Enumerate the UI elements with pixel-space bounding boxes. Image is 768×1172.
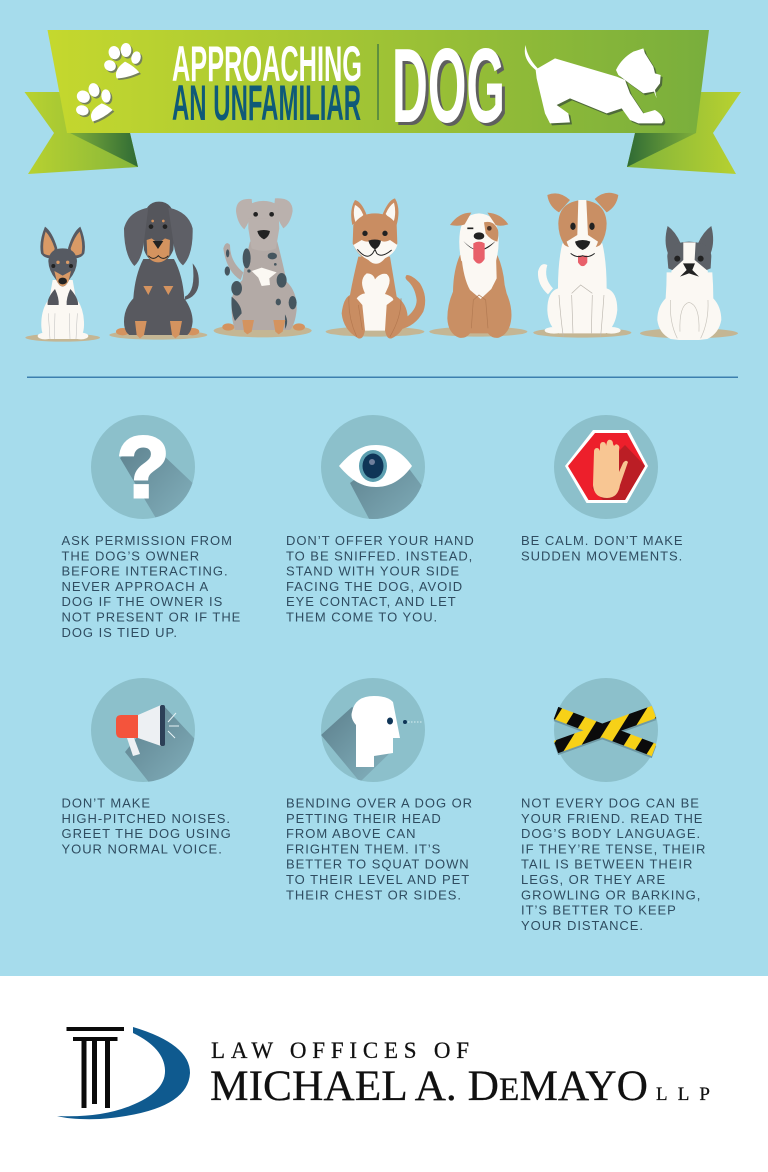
logo mark bbox=[57, 1027, 190, 1119]
dog 2: black and tan hound bbox=[109, 202, 207, 340]
right fold bbox=[627, 133, 696, 167]
text block: LEGS, OR THEY ARE bbox=[521, 872, 666, 887]
divider line bbox=[27, 376, 738, 378]
firm name line 1: LAW OFFICES OF bbox=[211, 1038, 469, 1063]
icon: stop hand sign bbox=[554, 415, 658, 519]
icon: head profile bbox=[321, 678, 425, 782]
tip 2: hand to be sniffed bbox=[286, 415, 475, 624]
text block: GROWLING OR BARKING, bbox=[521, 887, 701, 902]
text block: EYE CONTACT, AND LET bbox=[286, 594, 457, 609]
text block: BE CALM. DON’T MAKE bbox=[521, 533, 683, 548]
text block: FRIGHTEN THEM. IT’S bbox=[286, 841, 441, 856]
icon: paw prints bbox=[75, 43, 144, 123]
text block: PETTING THEIR HEAD bbox=[286, 811, 442, 826]
text block: BETTER TO SQUAT DOWN bbox=[286, 857, 470, 872]
text block: FROM ABOVE CAN bbox=[286, 826, 416, 841]
banner bbox=[24, 27, 741, 174]
firm name line 2: MICHAEL A. DEMAYO bbox=[210, 1063, 648, 1110]
firm suffix: LLP bbox=[656, 1084, 710, 1105]
tip 1: ask permission bbox=[62, 415, 241, 640]
icon: question mark: ? bbox=[117, 420, 169, 516]
text block: NEVER APPROACH A bbox=[62, 579, 209, 594]
text block: DOG IS TIED UP. bbox=[62, 625, 178, 640]
icon: eye bbox=[321, 415, 425, 519]
text block: TO BE SNIFFED. INSTEAD, bbox=[286, 548, 473, 563]
text block: TO THEIR LEVEL AND PET bbox=[286, 872, 470, 887]
text block: DON’T MAKE bbox=[62, 796, 151, 810]
text block: TAIL IS BETWEEN THEIR bbox=[521, 857, 693, 872]
text block: SUDDEN MOVEMENTS. bbox=[521, 548, 683, 563]
dog 3: grey spotted dog bbox=[214, 198, 312, 337]
right ribbon tail bbox=[627, 92, 741, 174]
footer panel bbox=[0, 976, 768, 1172]
tip 4: high-pitched noises bbox=[62, 678, 232, 856]
dog 5: pit bull bbox=[429, 213, 527, 338]
text block: DOG’S BODY LANGUAGE. bbox=[521, 826, 701, 841]
text block: YOUR NORMAL VOICE. bbox=[62, 841, 223, 856]
dog 1: small terrier bbox=[25, 227, 100, 342]
text block: HIGH-PITCHED NOISES. bbox=[62, 811, 231, 826]
banner: AN UNFAMILIAR bbox=[172, 75, 361, 131]
left fold bbox=[70, 133, 138, 167]
text block: YOUR FRIEND. READ THE bbox=[521, 811, 703, 826]
text block: BEFORE INTERACTING. bbox=[62, 564, 229, 579]
tip 6: body language bbox=[521, 678, 706, 933]
banner: DOG bbox=[395, 30, 508, 148]
icon: playing dog silhouette bbox=[525, 45, 665, 125]
text block: ASK PERMISSION FROM bbox=[62, 533, 233, 548]
dogs row bbox=[25, 193, 738, 342]
icon: megaphone bbox=[91, 678, 195, 782]
tip 3: be calm bbox=[521, 415, 683, 563]
text block: BENDING OVER A DOG OR bbox=[286, 796, 473, 810]
text block: NOT PRESENT OR IF THE bbox=[62, 610, 241, 624]
title: approaching: APPROACHING bbox=[172, 36, 362, 92]
dog 7: boston terrier bbox=[640, 226, 738, 340]
text block: FACING THE DOG, AVOID bbox=[286, 579, 463, 594]
text block: YOUR DISTANCE. bbox=[521, 918, 644, 933]
icon: question mark bbox=[91, 415, 200, 525]
text block: IF THEY’RE TENSE, THEIR bbox=[521, 841, 706, 856]
text block: THEM COME TO YOU. bbox=[286, 610, 438, 624]
text block: NOT EVERY DOG CAN BE bbox=[521, 796, 700, 810]
dog 4: husky bbox=[326, 198, 425, 339]
text block: THE DOG’S OWNER bbox=[62, 548, 200, 563]
text block: DOG IF THE OWNER IS bbox=[62, 594, 223, 609]
tip 5: bending over bbox=[286, 678, 473, 902]
text block: GREET THE DOG USING bbox=[62, 826, 232, 841]
dog 6: jack russell bbox=[533, 193, 631, 338]
text block: STAND WITH YOUR SIDE bbox=[286, 564, 460, 579]
banner: DOG bbox=[392, 27, 505, 145]
title divider bbox=[378, 44, 379, 120]
text block: DON’T OFFER YOUR HAND bbox=[286, 533, 475, 548]
text block: THEIR CHEST OR SIDES. bbox=[286, 887, 462, 902]
left ribbon tail bbox=[24, 92, 138, 174]
banner body bbox=[48, 30, 709, 133]
icon: caution tape bbox=[554, 678, 658, 782]
text block: IT’S BETTER TO KEEP bbox=[521, 903, 677, 918]
